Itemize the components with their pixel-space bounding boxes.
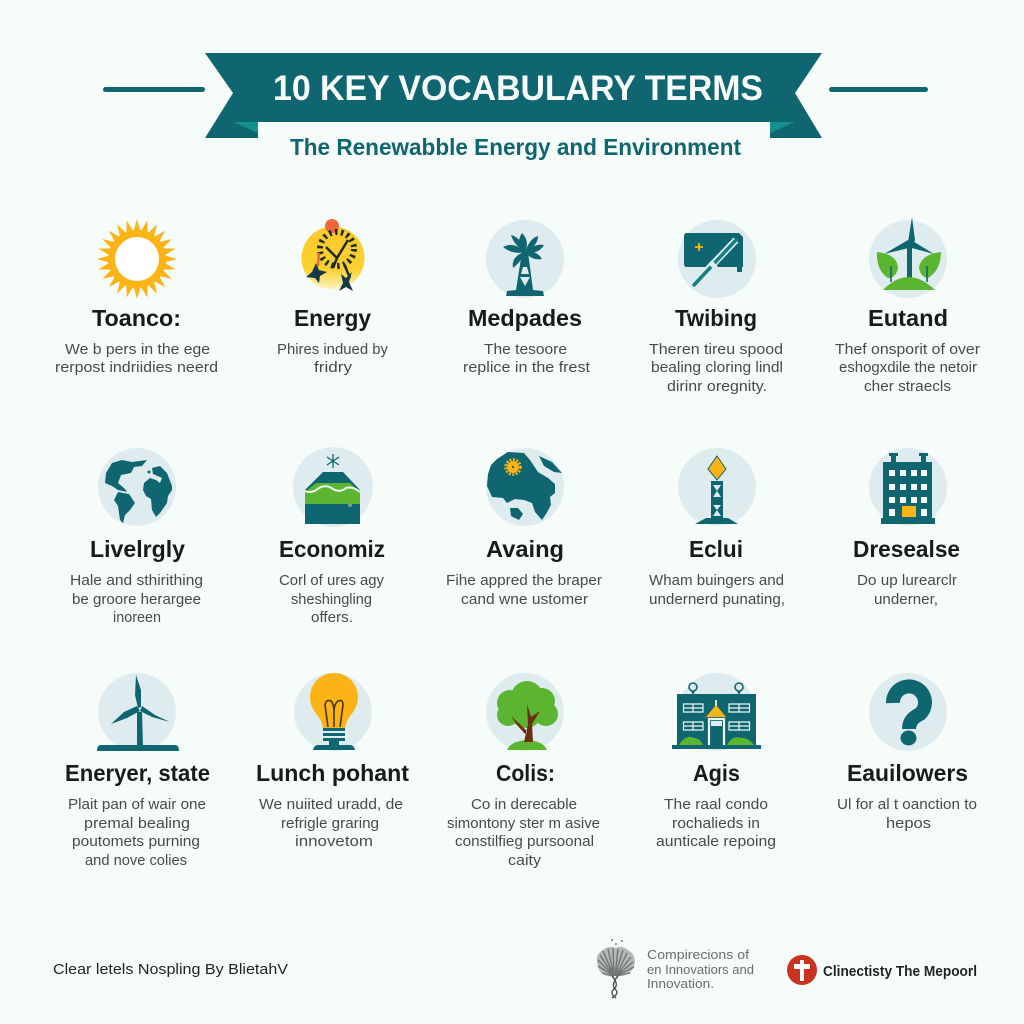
description: Fihe appred the braper	[446, 573, 602, 589]
heading: Lunch pohant	[256, 760, 409, 786]
description: premal bealing	[84, 816, 190, 832]
description: fridry	[314, 360, 353, 376]
heading: Avaing	[486, 536, 564, 562]
description: refrigle graring	[281, 816, 379, 832]
description: Theren tireu spood	[649, 342, 783, 358]
description	[837, 797, 977, 832]
footer logo text	[647, 947, 754, 991]
footer badge: red cross	[787, 955, 817, 985]
heading: Eauilowers	[847, 760, 968, 786]
description: replice in the frest	[463, 360, 590, 376]
description	[446, 573, 602, 608]
heading: Medpades	[468, 305, 582, 331]
heading: Toanco:	[92, 305, 181, 331]
footer logo text: Compirecions of	[647, 947, 749, 962]
icon: panel and tool	[678, 220, 756, 298]
description: dirinr oregnity.	[667, 379, 767, 395]
description: The tesoore	[484, 342, 567, 358]
footer logo text: Innovation.	[647, 976, 714, 991]
icon: office building	[869, 448, 947, 526]
footer logo: feathered tree	[597, 939, 635, 998]
icon: turbine with leaves	[869, 217, 947, 298]
description: poutomets purning	[72, 834, 200, 850]
description: cher straecls	[864, 379, 951, 395]
icon: mountain block	[293, 447, 373, 527]
term 2: Energy	[277, 219, 389, 376]
description: bealing cloring lindl	[651, 360, 783, 376]
term 3: Medpades	[463, 220, 590, 376]
heading: Eutand	[868, 305, 948, 331]
description: Plait pan of wair one	[68, 797, 206, 813]
description: underner,	[874, 592, 938, 608]
description	[463, 342, 590, 376]
description	[279, 573, 385, 626]
term 4: Twibing	[649, 220, 783, 395]
description	[857, 573, 957, 608]
description	[447, 797, 600, 869]
description: eshogxdile the netoir	[839, 360, 977, 376]
description: hepos	[886, 816, 931, 832]
subtitle: The Renewabble Energy and Environment	[290, 134, 741, 160]
heading: Twibing	[675, 305, 757, 331]
description: and nove colies	[85, 853, 187, 869]
description	[259, 797, 403, 850]
description: constilfieg pursoonal	[455, 834, 594, 850]
heading: Eclui	[689, 536, 743, 562]
footer badge text: Clinectisty The Mepoorl	[823, 964, 977, 980]
title: 10 KEY VOCABULARY TERMS	[273, 69, 763, 108]
description: Do up lurearclr	[857, 573, 957, 589]
description	[68, 797, 206, 869]
header banner	[103, 53, 928, 138]
description: aunticale repoing	[656, 834, 776, 850]
description: simontony ster m asive	[447, 816, 600, 832]
description: rerpost indriidies neerd	[55, 360, 218, 376]
term 7: Economiz	[279, 447, 385, 626]
term 9: Eclui	[649, 448, 785, 608]
description: innovetom	[295, 834, 373, 850]
description: Corl of ures agy	[279, 573, 385, 589]
description: cand wne ustomer	[461, 592, 588, 608]
term 11: Eneryer, state	[65, 673, 210, 869]
description: be groore herargee	[72, 592, 201, 608]
icon: yellow emblem	[302, 219, 364, 291]
heading: Economiz	[279, 536, 385, 562]
icon: globe with flower	[486, 448, 564, 526]
description	[649, 573, 785, 608]
description: We b pers in the ege	[65, 342, 210, 358]
heading: Eneryer, state	[65, 760, 210, 786]
description: The raal condo	[664, 797, 768, 813]
description: Ul for al t oanction to	[837, 797, 977, 813]
heading: Agis	[693, 760, 740, 786]
description	[70, 573, 203, 626]
heading: Energy	[294, 305, 371, 331]
description: Wham buingers and	[649, 573, 784, 589]
heading: Dresealse	[853, 536, 960, 562]
description: sheshingling	[291, 592, 372, 608]
description	[277, 342, 389, 376]
term 15: Eauilowers	[837, 673, 977, 832]
description	[649, 342, 783, 395]
description: Thef onsporit of over	[835, 342, 980, 358]
term 12: Lunch pohant	[256, 673, 409, 850]
term 6: Livelrgly	[70, 448, 203, 626]
description: Phires indued by	[277, 342, 389, 358]
term 5: Eutand	[835, 217, 980, 395]
description: caity	[508, 853, 542, 869]
term 8: Avaing	[446, 448, 602, 608]
description	[55, 342, 218, 376]
description: rochalieds in	[672, 816, 760, 832]
term 10: Dresealse	[853, 448, 960, 608]
icon: school building	[672, 673, 761, 751]
term 13: Colis	[447, 673, 600, 869]
icon: sun	[97, 219, 177, 299]
term 1: Toanco	[55, 219, 218, 376]
icon: tree	[486, 673, 564, 751]
description: Hale and sthirithing	[70, 573, 203, 589]
icon: light bulb	[294, 673, 372, 751]
icon: wind turbine	[97, 673, 179, 751]
description: Co in derecable	[471, 797, 577, 813]
description: offers.	[311, 610, 353, 626]
term 14: Agis	[656, 673, 776, 850]
description: We nuiited uradd, de	[259, 797, 403, 813]
description	[835, 342, 980, 395]
footer logo text: en Innovatiors and	[647, 962, 754, 977]
icon: beacon tower	[678, 448, 756, 526]
description: inoreen	[113, 610, 161, 626]
description: undernerd punating,	[649, 592, 785, 608]
icon: globe	[98, 448, 176, 526]
footer credit left: Clear letels Nospling By BlietahV	[53, 961, 288, 978]
icon: palm tower	[486, 220, 564, 298]
icon: question mark	[869, 673, 947, 751]
heading: Colis:	[496, 760, 555, 786]
description	[656, 797, 776, 850]
heading: Livelrgly	[90, 536, 185, 562]
